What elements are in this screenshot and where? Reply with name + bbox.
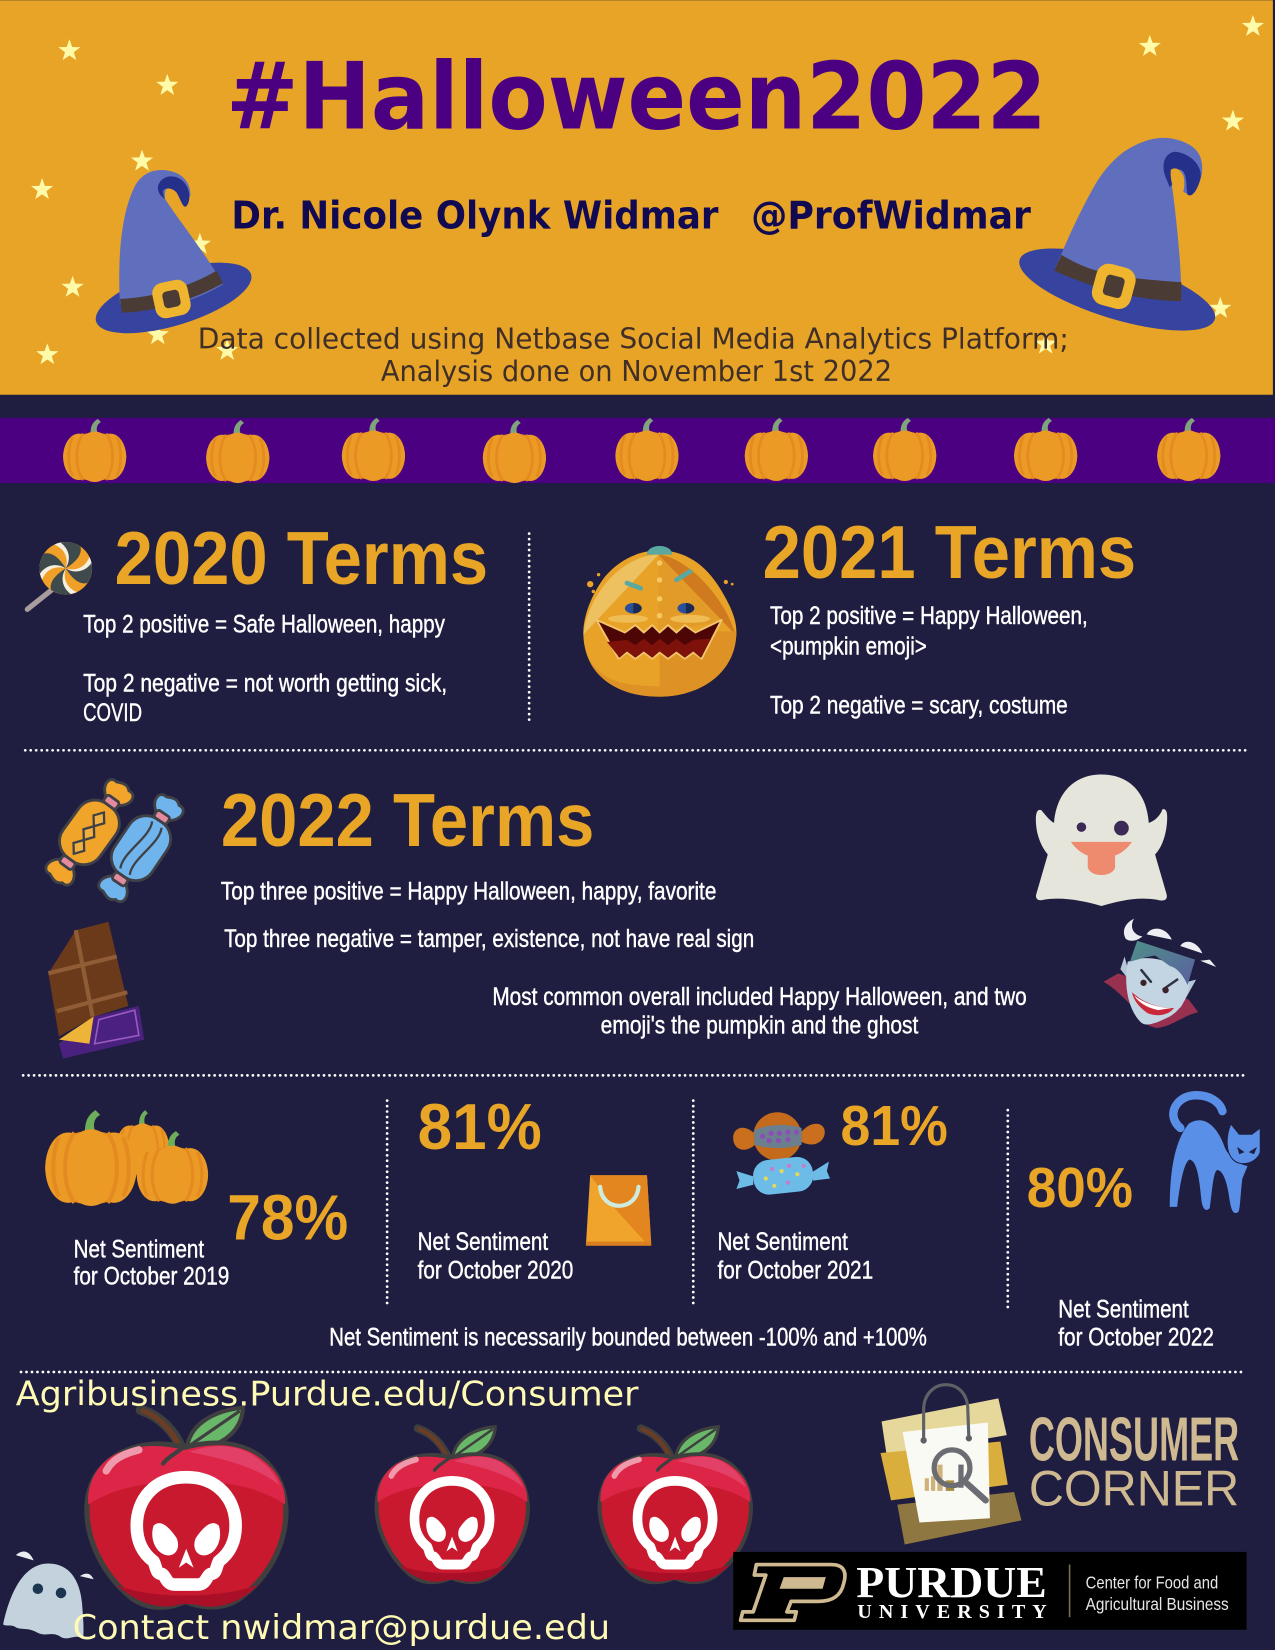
label: for October 2020 (418, 1256, 573, 1284)
stat: October 2020 (418, 1090, 651, 1284)
value: 80% (1027, 1157, 1133, 1220)
value: 81% (841, 1095, 948, 1158)
text: most common: emoji's the pumpkin and the ghost (601, 1011, 918, 1039)
text: 2021 top terms: Top 2 negative = scary, costume (770, 691, 1068, 719)
label (418, 1228, 573, 1284)
data source text (198, 322, 1069, 388)
icon: shopping bag (586, 1175, 651, 1246)
label: for October 2019 (74, 1263, 229, 1291)
label: Net Sentiment (717, 1228, 848, 1256)
heading: 2020 terms: 2020 Terms (115, 516, 488, 600)
value: 78% (227, 1181, 348, 1253)
pumpkin band (0, 418, 1275, 483)
data source text: Data collected using Netbase Social Media Analytics Platform; (198, 322, 1069, 355)
label: Net Sentiment (1058, 1295, 1189, 1323)
logo: consumer corner wordmark: CORNER (1029, 1460, 1239, 1517)
logo: purdue university: Agricultural Business (1086, 1594, 1229, 1614)
icon: three pumpkins (45, 1110, 208, 1206)
stars (31, 15, 1264, 364)
contact text: Contact nwidmar@purdue.edu (73, 1608, 610, 1647)
stat: October 2021 (717, 1095, 948, 1284)
icon: jack-o-lantern (583, 546, 736, 697)
link text: Agribusiness.Purdue.edu/Consumer (16, 1375, 639, 1414)
text: 2020 top terms: Top 2 negative = not worth getting sick, (83, 669, 447, 697)
note: sentiment bounds: Net Sentiment is necessarily bounded between -100% and +100% (329, 1324, 927, 1352)
text: 2021 top terms: <pumpkin emoji> (770, 633, 927, 661)
icon: chocolate bar (48, 922, 144, 1059)
stat: October 2022 (1027, 1095, 1260, 1352)
value: 81% (418, 1090, 542, 1163)
data source text: Analysis done on November 1st 2022 (381, 355, 892, 388)
text: 2022 positive: Top three positive = Happy Halloween, happy, favorite (221, 878, 716, 906)
icon: ghost (1036, 775, 1167, 906)
label: for October 2022 (1058, 1324, 1214, 1352)
panel: footer (3, 1375, 1247, 1647)
text: 2020 top terms: Top 2 positive = Safe Halloween, happy (83, 610, 445, 638)
text: 2022 negative: Top three negative = tamper, existence, not have real sign (224, 925, 754, 953)
label: for October 2021 (717, 1256, 873, 1284)
stat: October 2019 (45, 1110, 348, 1291)
panel: net sentiment (45, 1090, 1260, 1352)
icon: wrapped candies (36, 771, 193, 910)
label (1058, 1295, 1214, 1352)
panel: 2022 terms (36, 771, 1216, 1059)
author name: Dr. Nicole Olynk Widmar (231, 194, 719, 238)
label (74, 1235, 229, 1291)
logo: purdue university: UNIVERSITY (857, 1601, 1047, 1623)
label (717, 1228, 873, 1284)
text: 2020 top terms: COVID (83, 699, 142, 727)
text: 2021 top terms: Top 2 positive = Happy Halloween, (770, 602, 1088, 630)
logo: consumer corner wordmark (1029, 1405, 1239, 1517)
logo: purdue university (733, 1552, 1247, 1630)
heading: 2021 terms: 2021 Terms (763, 510, 1136, 594)
icon: witch hat left (88, 170, 259, 348)
text: most common: Most common overall included Happy Halloween, and two (492, 983, 1027, 1011)
icon: witch hat right (1011, 138, 1223, 348)
logo: consumer corner bag (881, 1385, 1021, 1545)
title: #Halloween2022 (226, 43, 1047, 151)
heading: 2022 terms: 2022 Terms (221, 778, 594, 862)
panel: 2020 terms (27, 516, 488, 727)
logo: purdue university: Center for Food and (1086, 1573, 1218, 1593)
icon: vampire (1104, 919, 1216, 1028)
panel: header (0, 0, 1273, 395)
text: most common (492, 983, 1027, 1039)
icon: poison apple middle (377, 1427, 528, 1582)
icon: round candies (733, 1112, 830, 1196)
text: 2021 top terms (770, 602, 1088, 719)
panel: 2021 terms (583, 510, 1136, 719)
icon: small ghost (3, 1551, 94, 1639)
icon: poison apple large (87, 1408, 286, 1607)
label: Net Sentiment (418, 1228, 548, 1256)
icon: cat in blue (1170, 1095, 1260, 1213)
label: Net Sentiment (74, 1235, 204, 1263)
logo: purdue university: PURDUE (856, 1558, 1047, 1607)
icon: poison apple right (600, 1427, 751, 1582)
twitter handle: @ProfWidmar (751, 194, 1031, 238)
text: 2020 top terms (83, 610, 447, 727)
icon: lollipop (27, 539, 95, 609)
